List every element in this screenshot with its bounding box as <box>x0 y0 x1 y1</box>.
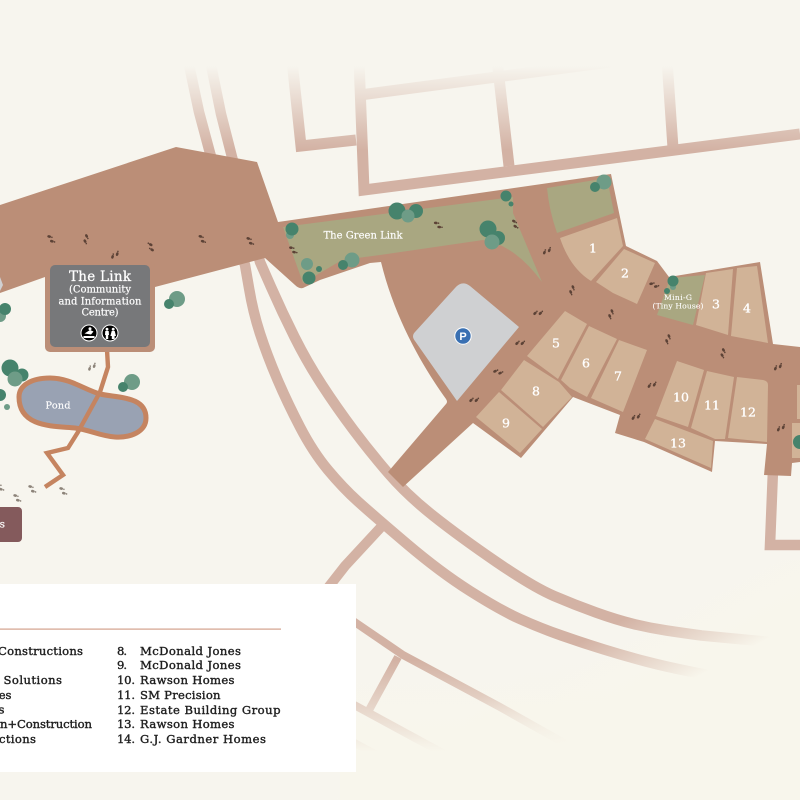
label: Mini-G: Mini-G <box>664 293 692 302</box>
lot 12 <box>728 377 768 442</box>
street: south branch from arc <box>320 526 382 598</box>
walking track <box>45 350 108 487</box>
road network <box>188 60 800 762</box>
street: south-west lower road <box>345 700 450 757</box>
footprints on open ground <box>0 361 96 502</box>
lot numbers <box>502 240 756 450</box>
lot numbers: 12 <box>740 404 756 420</box>
lot 5 <box>527 311 587 379</box>
walkway plaza <box>0 147 800 487</box>
subheading: community and information centre: (Community <box>69 285 131 296</box>
display home lots <box>476 218 800 468</box>
lot 1 <box>560 218 623 281</box>
lot numbers: 10 <box>673 390 689 404</box>
lot numbers: 3 <box>712 296 720 312</box>
panel: The Link community centre <box>45 262 155 352</box>
legend column one: n+Construction <box>0 717 93 731</box>
lot 7 <box>591 340 647 412</box>
street: north main <box>359 60 800 190</box>
panel: The Green Link parkland <box>283 197 542 283</box>
legend column two <box>117 644 280 746</box>
legend column two: 14. <box>117 732 135 746</box>
legend column two: 8. <box>117 644 127 658</box>
subheading: community and information centre: Centre) <box>82 308 119 319</box>
parking area <box>413 283 519 401</box>
icon: parking: P <box>459 331 467 343</box>
label: Tiny House: (Tiny House) <box>652 302 704 310</box>
lot 10 <box>656 361 704 427</box>
legend column two: 9. <box>117 658 127 672</box>
street: north upper cross <box>360 62 610 95</box>
lot numbers: 5 <box>552 336 560 350</box>
legend column two: Rawson Homes <box>140 673 235 687</box>
legend column two: G.J. Gardner Homes <box>140 732 266 746</box>
lot numbers: 2 <box>621 266 629 280</box>
lot numbers: 11 <box>704 398 720 412</box>
legend column two: Rawson Homes <box>140 717 235 731</box>
heading: The Link: The Link <box>69 269 132 285</box>
legend column one: Solutions <box>4 673 62 687</box>
lot 8 <box>501 360 572 427</box>
legend column two: Estate Building Group <box>140 703 280 717</box>
street: south-east stub <box>770 470 800 545</box>
legend column two: McDonald Jones <box>140 658 241 672</box>
label: Pond: Pond <box>46 400 70 412</box>
building label: maroon tag <box>0 507 22 542</box>
lot upper right <box>797 385 800 419</box>
divider <box>0 628 281 630</box>
trees <box>0 174 678 410</box>
Mini-G tiny house lot <box>652 275 705 325</box>
legend column two: SM Precision <box>140 688 221 702</box>
legend column one <box>0 644 93 746</box>
lot numbers: 6 <box>582 356 590 370</box>
lot numbers: 7 <box>614 368 622 384</box>
lot 11 <box>691 371 734 439</box>
lot numbers: 4 <box>743 300 751 316</box>
lot 3 <box>696 269 733 335</box>
legend column one: Constructions <box>0 644 83 658</box>
street: south-west faint road <box>345 738 390 762</box>
lot numbers: 13 <box>670 436 686 450</box>
legend column two: McDonald Jones <box>140 644 241 658</box>
lot numbers: 8 <box>532 384 540 398</box>
street: south-west branch <box>368 657 398 712</box>
lot 4 <box>731 266 768 343</box>
icon: cafe <box>81 325 97 341</box>
lot 14 marker <box>793 435 800 449</box>
legend column two: 12. <box>117 703 135 717</box>
legend column one: ctions <box>0 732 36 746</box>
lot 14 <box>792 423 800 458</box>
street: south-west long road <box>340 612 580 752</box>
green space north <box>547 178 614 233</box>
pond with walking track <box>19 350 146 487</box>
label: The Green Link: The Green Link <box>324 230 403 242</box>
footprints on pathways <box>46 219 786 433</box>
lot 2 <box>596 249 655 304</box>
icon: toilets <box>102 325 118 341</box>
legend column two: 13. <box>117 717 135 731</box>
lot 13 <box>645 419 713 468</box>
subheading: community and information centre <box>58 285 142 319</box>
street: connector two <box>667 60 673 148</box>
curved road: outer arc <box>188 60 775 688</box>
panel: builders legend <box>0 584 356 772</box>
legend column two: 10. <box>117 673 135 687</box>
curved road: inner arc <box>210 60 770 642</box>
legend column two: 11. <box>117 688 135 702</box>
lot 9 <box>476 392 542 453</box>
subheading: community and information centre: and Information <box>58 296 142 307</box>
grey building edge <box>0 277 3 291</box>
lot numbers: 9 <box>502 416 510 430</box>
lot 6 <box>561 326 617 397</box>
lot numbers: 1 <box>589 240 597 256</box>
street: north grid <box>292 60 356 146</box>
street: connector one <box>497 60 509 166</box>
